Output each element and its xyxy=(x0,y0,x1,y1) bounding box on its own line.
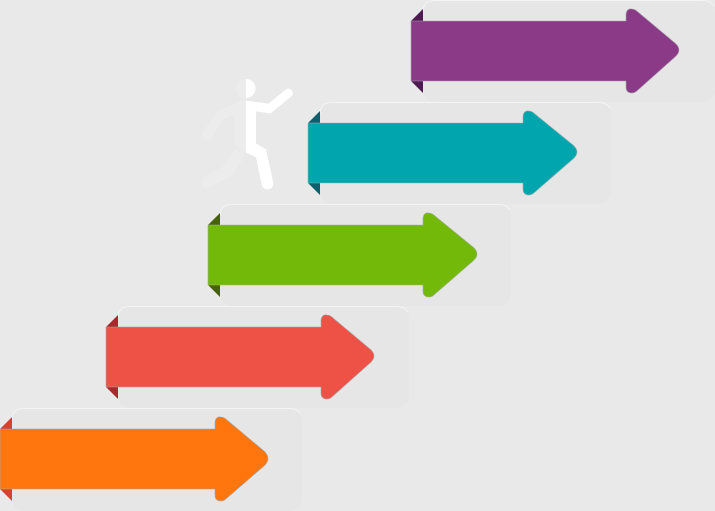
step 1: orange xyxy=(0,408,302,511)
fold: red bottom xyxy=(106,387,118,399)
fold: orange top xyxy=(0,417,12,429)
step 2: red xyxy=(106,306,409,408)
runner figure xyxy=(202,79,293,189)
arrow: green xyxy=(208,213,477,297)
panel: red step xyxy=(118,306,409,408)
step 3: green xyxy=(208,204,511,306)
fold: green bottom xyxy=(208,285,220,297)
fold: orange bottom xyxy=(0,489,12,501)
fold: teal top xyxy=(308,111,320,123)
arrow: teal xyxy=(308,111,577,195)
fold: green top xyxy=(208,213,220,225)
arrow: orange xyxy=(0,417,268,501)
fold: teal bottom xyxy=(308,183,320,195)
fold: red top xyxy=(106,315,118,327)
runner: faint half xyxy=(202,79,246,188)
panel: green step xyxy=(220,204,511,306)
step 4: teal xyxy=(308,102,611,204)
panel: orange step xyxy=(12,408,302,511)
runner: white half xyxy=(246,79,293,189)
step 5: purple xyxy=(411,0,715,102)
arrow: red xyxy=(106,315,374,399)
arrow: purple xyxy=(411,9,679,93)
fold: purple bottom xyxy=(411,81,423,93)
panel: purple step xyxy=(423,0,715,102)
fold: purple top xyxy=(411,9,423,21)
panel: teal step xyxy=(320,102,611,204)
